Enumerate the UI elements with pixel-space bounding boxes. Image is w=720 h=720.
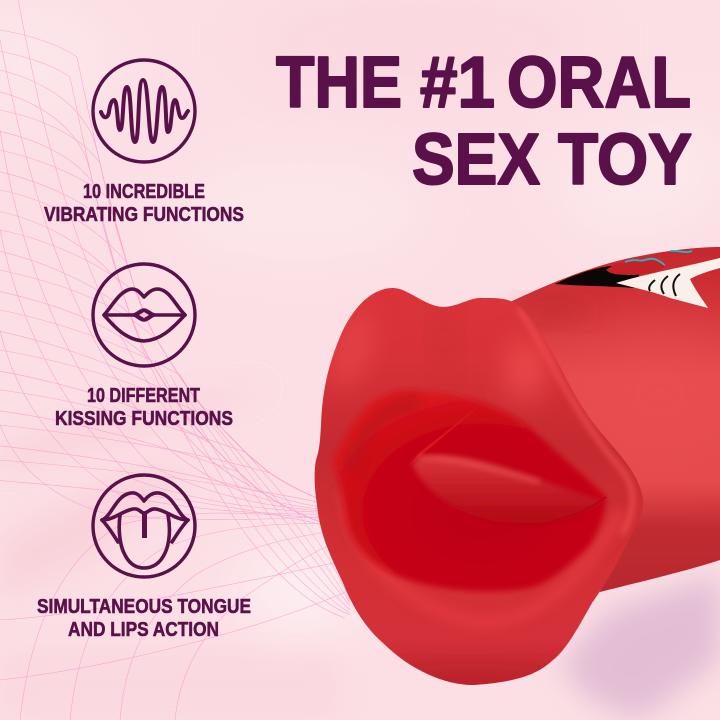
feature text: kissing: 10 DIFFERENT	[87, 384, 200, 407]
mouth interior	[332, 391, 606, 591]
tongue	[412, 456, 604, 525]
title	[276, 43, 692, 200]
lip highlights	[328, 314, 372, 383]
title line 1: THE	[276, 43, 402, 123]
feature text: kissing	[55, 384, 233, 430]
feature text: vibrating	[44, 180, 244, 226]
outer lips	[314, 288, 643, 685]
title line 2: TOY	[558, 120, 692, 200]
icon: tongue	[93, 475, 195, 577]
feature text: tongue and lips	[37, 595, 251, 641]
product	[300, 247, 720, 700]
feature text: vibrating: 10 INCREDIBLE	[83, 180, 205, 203]
icon: lips	[93, 264, 195, 366]
control panel graphic	[555, 251, 720, 308]
feature text: kissing: KISSING FUNCTIONS	[55, 407, 233, 430]
icon: vibration wave	[93, 60, 195, 162]
wave line pattern	[0, 0, 350, 720]
product body	[510, 247, 720, 592]
feature text: tongue and lips: AND LIPS ACTION	[68, 618, 219, 641]
mouth corner edge	[530, 497, 606, 525]
title line 1	[276, 43, 691, 123]
product shadow	[560, 575, 720, 720]
title line 1: #1	[420, 43, 495, 123]
title line 1: ORAL	[507, 43, 691, 123]
feature text: tongue and lips: SIMULTANEOUS TONGUE	[37, 595, 251, 618]
title line 2: SEX	[412, 120, 540, 200]
feature text: vibrating: VIBRATING FUNCTIONS	[44, 203, 244, 226]
title line 2	[412, 120, 692, 200]
